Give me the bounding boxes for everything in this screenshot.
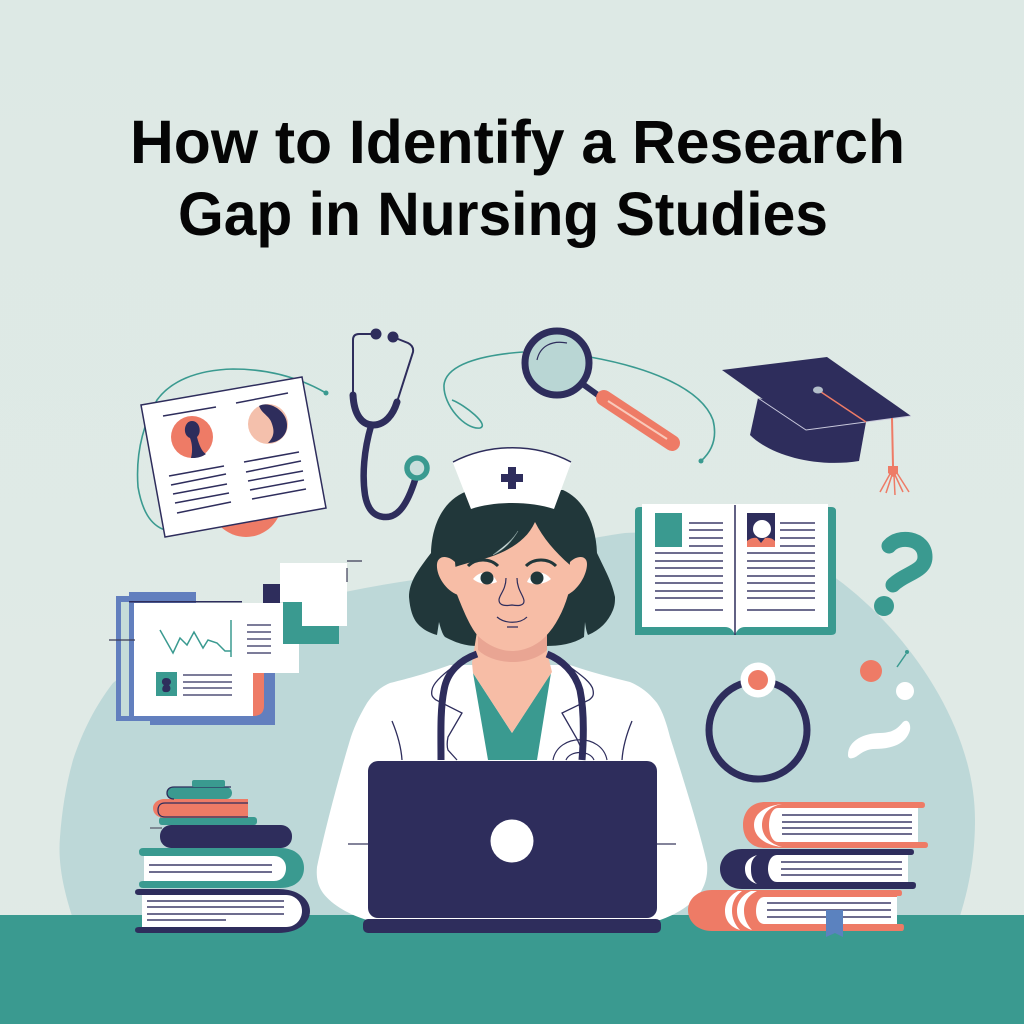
- hair: [409, 490, 615, 646]
- ears: [437, 557, 587, 595]
- icon: stethoscope: [353, 328, 427, 517]
- neck and chest: [472, 625, 552, 733]
- icon: graduation cap: [722, 357, 911, 495]
- neck stethoscope: [441, 654, 583, 760]
- small teal book: [167, 787, 232, 799]
- nose and mouth: [497, 578, 527, 627]
- face: [454, 522, 571, 651]
- top coral book: [743, 802, 928, 848]
- thin teal book: [159, 817, 257, 825]
- neck shadow: [478, 634, 547, 662]
- bottom navy book: [135, 889, 310, 933]
- floor band: [0, 915, 1024, 1024]
- title: Gap in Nursing Studies: [178, 180, 828, 248]
- coral book: [153, 799, 248, 818]
- book stack right: [688, 802, 928, 937]
- title: How to Identify a Research: [130, 108, 905, 176]
- navy closed book: [160, 825, 292, 848]
- top teal book: [192, 780, 225, 787]
- nurse cap: [453, 448, 571, 509]
- background hill: [60, 532, 975, 916]
- icon: question mark: [874, 539, 925, 616]
- book stack left: [135, 780, 310, 933]
- eyes and brows: [468, 560, 556, 584]
- icon: open book: [635, 504, 836, 635]
- coat: [317, 665, 707, 920]
- hair bang highlight: [493, 531, 518, 555]
- bottom coral book: [688, 890, 904, 931]
- navy book: [720, 849, 916, 889]
- coat lapels: [392, 667, 632, 760]
- coat stethoscope chest piece: [553, 740, 607, 760]
- decorative dots and swoosh: [848, 650, 914, 758]
- scrub top: [473, 673, 551, 760]
- title: [130, 108, 905, 248]
- document cluster with chart: [109, 561, 362, 725]
- icon: magnifying glass with curve: [444, 331, 715, 464]
- bookmark: [826, 910, 843, 937]
- icon: research paper with portraits: [138, 369, 328, 537]
- teal book: [139, 848, 304, 888]
- nurse: [317, 448, 707, 920]
- icon: ring with dot: [709, 662, 807, 779]
- coat side lines: [348, 843, 676, 845]
- laptop: [363, 761, 661, 933]
